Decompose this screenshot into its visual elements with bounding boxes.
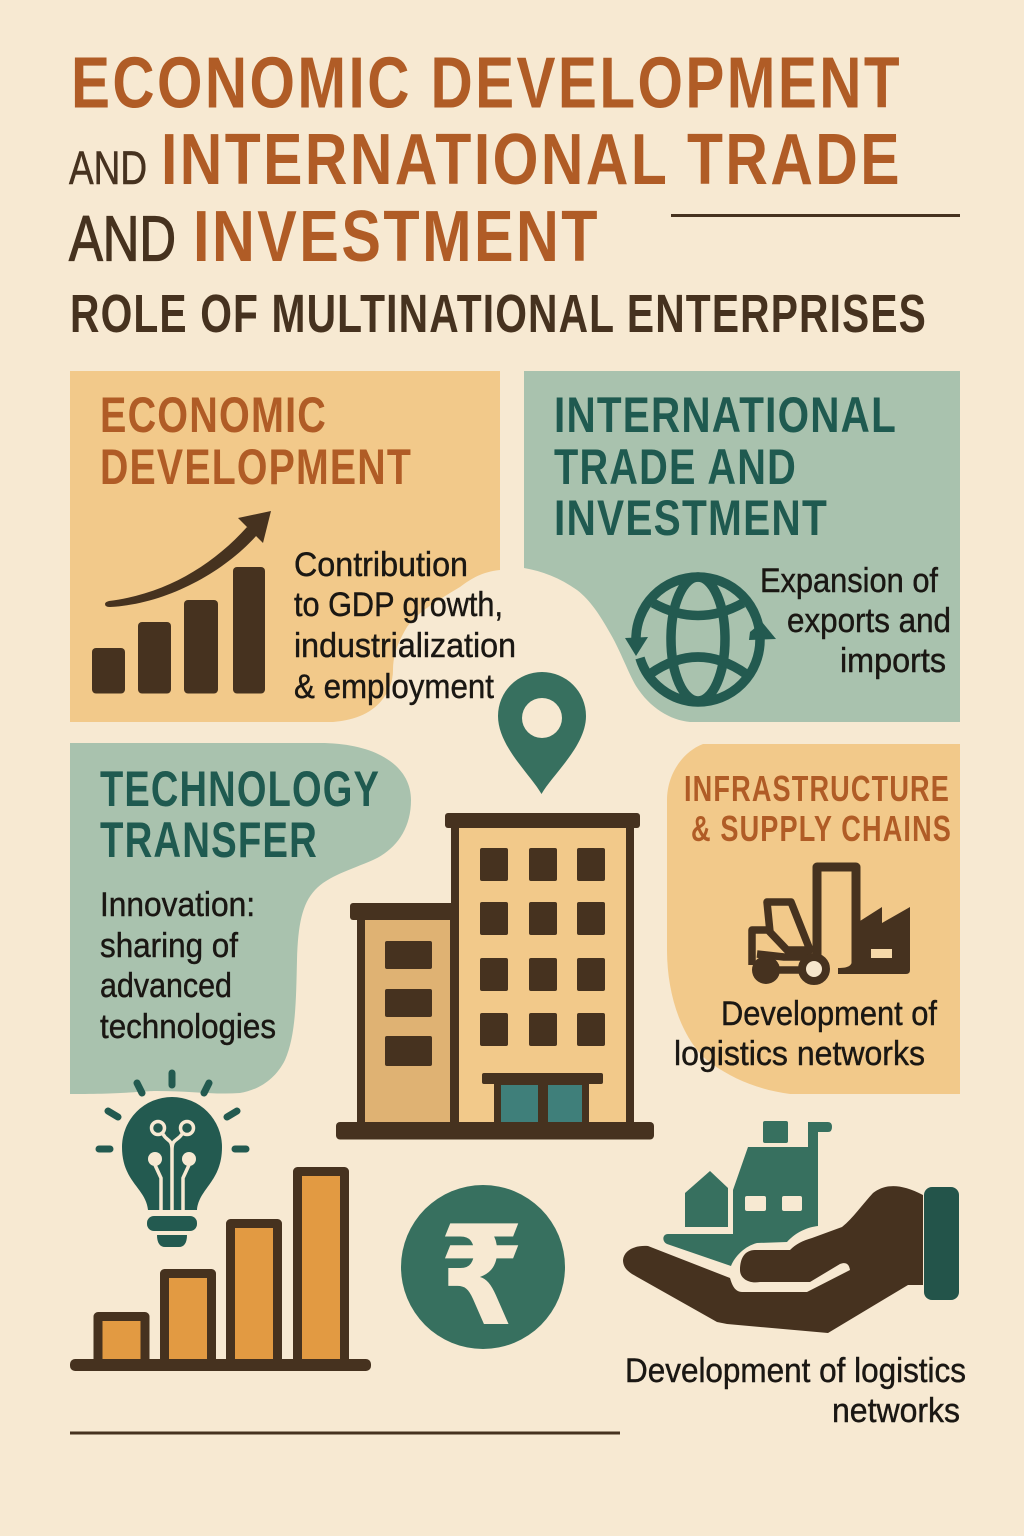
text: economic development description: Contribution	[294, 546, 468, 584]
title	[69, 44, 902, 277]
text: trade description: Expansion of	[760, 562, 938, 600]
text: economic development description: industrialization	[294, 627, 516, 665]
heading: international trade and investment	[554, 387, 897, 546]
text: economic development description: to GDP growth,	[294, 586, 503, 624]
heading: international trade and investment: TRADE AND	[554, 439, 797, 495]
text: infrastructure description: Development of	[721, 995, 937, 1033]
text: trade description: imports	[840, 642, 946, 680]
text: logistics caption	[625, 1352, 966, 1430]
panel: infrastructure and supply chains	[667, 744, 960, 1094]
heading: international trade and investment: INVESTMENT	[554, 490, 828, 546]
text: infrastructure description: logistics networks	[674, 1035, 925, 1073]
text: economic development description: & employment	[294, 668, 494, 706]
heading: international trade and investment: INTERNATIONAL	[554, 387, 897, 443]
text: technology description	[100, 886, 276, 1046]
panel: economic development	[70, 371, 516, 722]
text: technology description: advanced	[100, 967, 232, 1005]
text: logistics caption: networks	[832, 1392, 960, 1430]
icon: office buildings	[336, 813, 654, 1140]
icon: globe with arrows	[625, 577, 776, 702]
icon: rupee coin	[401, 1185, 565, 1357]
icon: forklift and factory	[752, 867, 910, 984]
heading: economic development: ECONOMIC	[100, 387, 327, 443]
heading: technology transfer: TECHNOLOGY	[100, 761, 380, 817]
text: infrastructure description	[674, 995, 937, 1073]
icon: location pin	[498, 672, 586, 794]
title: AND	[69, 141, 147, 194]
text: logistics caption: Development of logistics	[625, 1352, 966, 1390]
icon: growth bars with arrow	[92, 511, 271, 694]
text: trade description: exports and	[787, 602, 951, 640]
text: economic development description	[294, 546, 516, 706]
text: technology description: sharing of	[100, 927, 238, 965]
title: AND	[69, 202, 176, 274]
heading: technology transfer: TRANSFER	[100, 812, 318, 868]
text: technology description: technologies	[100, 1008, 276, 1046]
chart: orange bars	[70, 1172, 371, 1371]
text: technology description: Innovation:	[100, 886, 255, 924]
text: trade description	[760, 562, 951, 680]
icon: hand holding buildings	[623, 1121, 959, 1333]
heading: economic development: DEVELOPMENT	[100, 439, 412, 495]
panel: international trade and investment	[524, 371, 960, 722]
heading: infrastructure and supply chains	[684, 768, 952, 849]
icon: lightbulb with circuit	[99, 1073, 246, 1247]
icon: rupee coin: ₹	[439, 1196, 524, 1357]
panel: technology transfer	[70, 743, 411, 1094]
heading: technology transfer	[100, 761, 380, 868]
heading: economic development	[100, 387, 412, 495]
title: INVESTMENT	[193, 197, 600, 277]
